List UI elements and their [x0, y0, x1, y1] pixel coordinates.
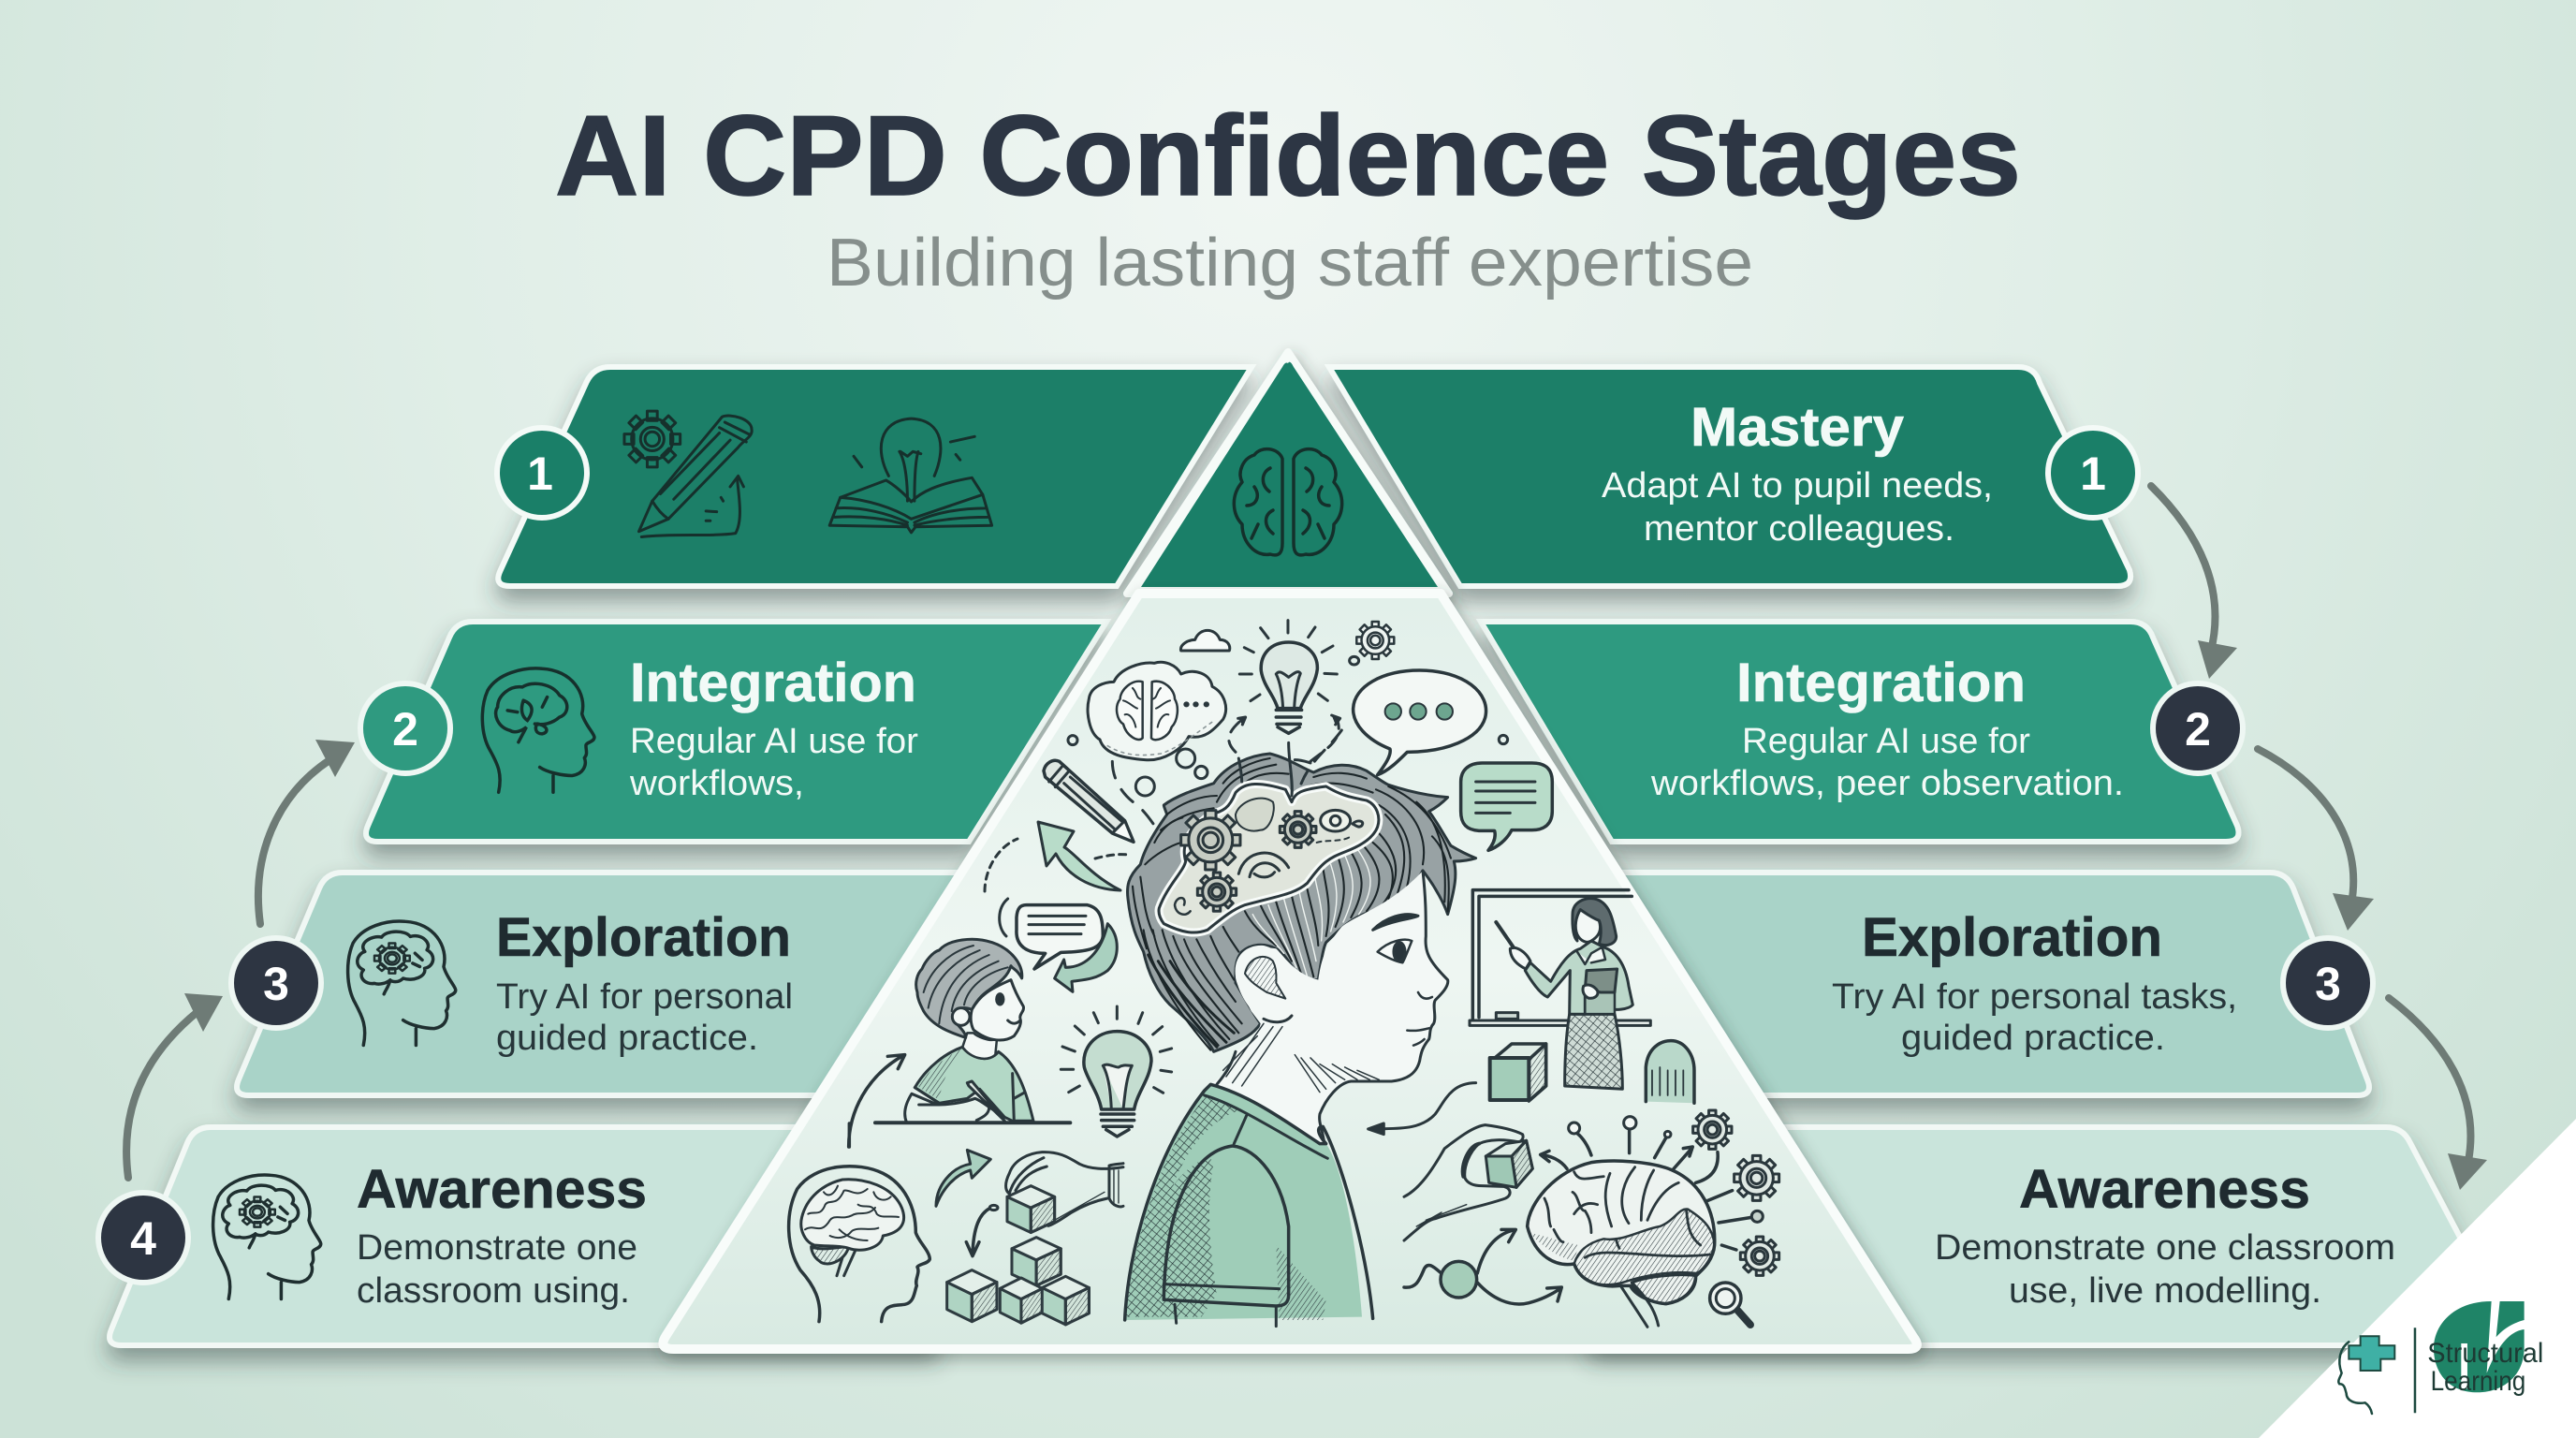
panel: left exploration band — [231, 873, 1076, 1095]
icon: bean dot — [1350, 656, 1359, 665]
description: Integration — [629, 722, 918, 803]
logo: wordmark: Structural — [2427, 1338, 2543, 1369]
heading: Awareness: Awareness — [2019, 1159, 2310, 1220]
panel: left mastery band — [497, 367, 1251, 586]
pyramid apex: brain — [1127, 352, 1449, 594]
logo: head outline — [2338, 1342, 2372, 1414]
arrow: 2 to 3 right — [2258, 749, 2374, 931]
child at desk — [849, 899, 1117, 1147]
arrow: to hand — [1368, 1083, 1476, 1135]
description: Mastery: Adapt AI to pupil needs, — [1602, 466, 1993, 506]
icon: light bulb top — [1229, 621, 1340, 761]
description: Exploration: Try AI for personal — [496, 977, 793, 1017]
top cluster: cloud, thought bubble, bulb and pencil — [1044, 621, 1394, 849]
green arrow — [1038, 822, 1120, 890]
badge 1 right: 1 — [2080, 448, 2106, 500]
arrow: down to cubes — [966, 1205, 998, 1256]
icon: cube — [1490, 1044, 1546, 1101]
description: Mastery: mentor colleagues. — [1644, 509, 1954, 549]
logo: wordmark second line: Learning — [2431, 1366, 2525, 1397]
white corner — [2259, 1119, 2576, 1438]
illustration: child with learning icons — [789, 621, 1779, 1327]
cube stack — [947, 1238, 1089, 1325]
arrow: 4 to 3 left — [126, 993, 223, 1178]
child: brain with gears — [1159, 730, 1379, 932]
badge 1 left: 1 — [527, 448, 553, 500]
description: Awareness: Demonstrate one — [357, 1228, 637, 1268]
logo — [2338, 1301, 2543, 1414]
icon: brain — [1234, 449, 1342, 555]
dashed path — [985, 839, 1128, 891]
logo: white stem — [2461, 1343, 2467, 1388]
badge 1 right — [2048, 428, 2138, 518]
icon: head with gear brain — [348, 921, 456, 1045]
icon: pencil — [1044, 760, 1134, 842]
badge 3 left — [231, 938, 321, 1028]
arrow: 3 to 2 left — [258, 740, 355, 924]
icon: head with brain — [789, 1167, 929, 1322]
child: hair strands — [1133, 758, 1451, 1050]
chain arrows with node — [1404, 1229, 1561, 1304]
panel: left awareness band — [98, 1127, 936, 1345]
panel: right mastery band — [1329, 367, 2138, 586]
icon: arch block — [1646, 1041, 1694, 1103]
arrow: 3 to 4 right — [2389, 998, 2487, 1190]
description: Awareness — [357, 1228, 637, 1311]
green arrow bottom — [936, 1150, 990, 1206]
description: Integration: workflows, peer observation. — [1650, 764, 2124, 803]
badge 1 left — [497, 428, 587, 518]
description: Integration: workflows, — [629, 764, 804, 803]
description: Awareness — [1935, 1228, 2395, 1311]
speech bubbles — [1354, 670, 1552, 850]
description: Mastery — [1602, 466, 1993, 549]
icon: gear top — [1356, 622, 1394, 659]
description: Exploration — [496, 977, 793, 1058]
child: shirt — [1125, 1084, 1373, 1327]
panel: right awareness band — [1591, 1127, 2510, 1345]
icon: light bulb middle — [1061, 1006, 1172, 1137]
logo: leaf mark — [2434, 1301, 2525, 1392]
icon: speech bubble — [1354, 670, 1508, 775]
heading: Awareness: Awareness — [357, 1159, 647, 1220]
icon: thought cloud with brain — [1068, 662, 1226, 849]
description: Integration: Regular AI use for — [1742, 722, 2030, 761]
child: eye and brow — [1373, 915, 1432, 1046]
arrow: 1 to 2 right — [2151, 486, 2237, 679]
icon: green chat bubble — [1461, 763, 1552, 850]
description: Exploration: guided practice. — [496, 1019, 758, 1058]
teacher at whiteboard — [1470, 890, 1694, 1103]
heading: Integration: Integration — [1736, 653, 2026, 713]
heading: Exploration: Exploration — [496, 907, 791, 968]
pyramid body — [663, 594, 1917, 1349]
panel: right integration band — [1481, 622, 2243, 842]
badge 2 left: 2 — [392, 703, 418, 756]
bottom right cluster — [1404, 1110, 1779, 1327]
description: Awareness: Demonstrate one classroom — [1935, 1228, 2395, 1268]
child: face and neck — [1208, 871, 1448, 1145]
badge 3 right: 3 — [2315, 958, 2341, 1010]
description: Exploration — [1832, 977, 2237, 1058]
logo: divider — [2414, 1328, 2416, 1413]
badge 2 right — [2153, 683, 2243, 773]
child: ear — [1236, 946, 1293, 1022]
large brain with connectors — [1528, 1110, 1779, 1327]
icon: small cloud — [1180, 630, 1230, 651]
icon: head with network brain — [482, 668, 594, 792]
description: Exploration: Try AI for personal tasks, — [1832, 977, 2237, 1017]
panel: left integration band — [360, 622, 1106, 842]
hand with cube — [1006, 1152, 1123, 1233]
description: Awareness: use, live modelling. — [2009, 1271, 2321, 1311]
heading: Exploration: Exploration — [1862, 907, 2162, 968]
arrow: up from head — [848, 1123, 851, 1147]
icon: head with gear brain — [213, 1175, 321, 1299]
bottom left cluster — [789, 1123, 1123, 1325]
subtitle: Building lasting staff expertise — [827, 226, 1753, 301]
child: hair — [1127, 754, 1476, 1051]
heading: Integration: Integration — [630, 653, 916, 713]
badge 4 left — [98, 1193, 188, 1283]
icon: chat bubble with swirl — [1000, 899, 1117, 991]
logo: teal cross — [2349, 1336, 2394, 1371]
heading: Mastery: Mastery — [1690, 397, 1904, 458]
description: Exploration: guided practice. — [1901, 1019, 2165, 1058]
panel: right exploration band — [1498, 873, 2373, 1095]
badge 2 left — [360, 683, 450, 773]
title: AI CPD Confidence Stages — [555, 92, 2021, 219]
description: Integration: Regular AI use for — [630, 722, 918, 761]
badge 2 right: 2 — [2185, 703, 2211, 756]
hand with cube — [1404, 1125, 1532, 1240]
badge 3 right — [2283, 938, 2373, 1028]
description: Awareness: classroom using. — [357, 1271, 630, 1311]
icons: gear, pencil and book — [624, 411, 992, 536]
badge 4 left: 4 — [130, 1212, 156, 1265]
description: Integration — [1650, 722, 2124, 803]
badge 3 left: 3 — [263, 958, 289, 1010]
